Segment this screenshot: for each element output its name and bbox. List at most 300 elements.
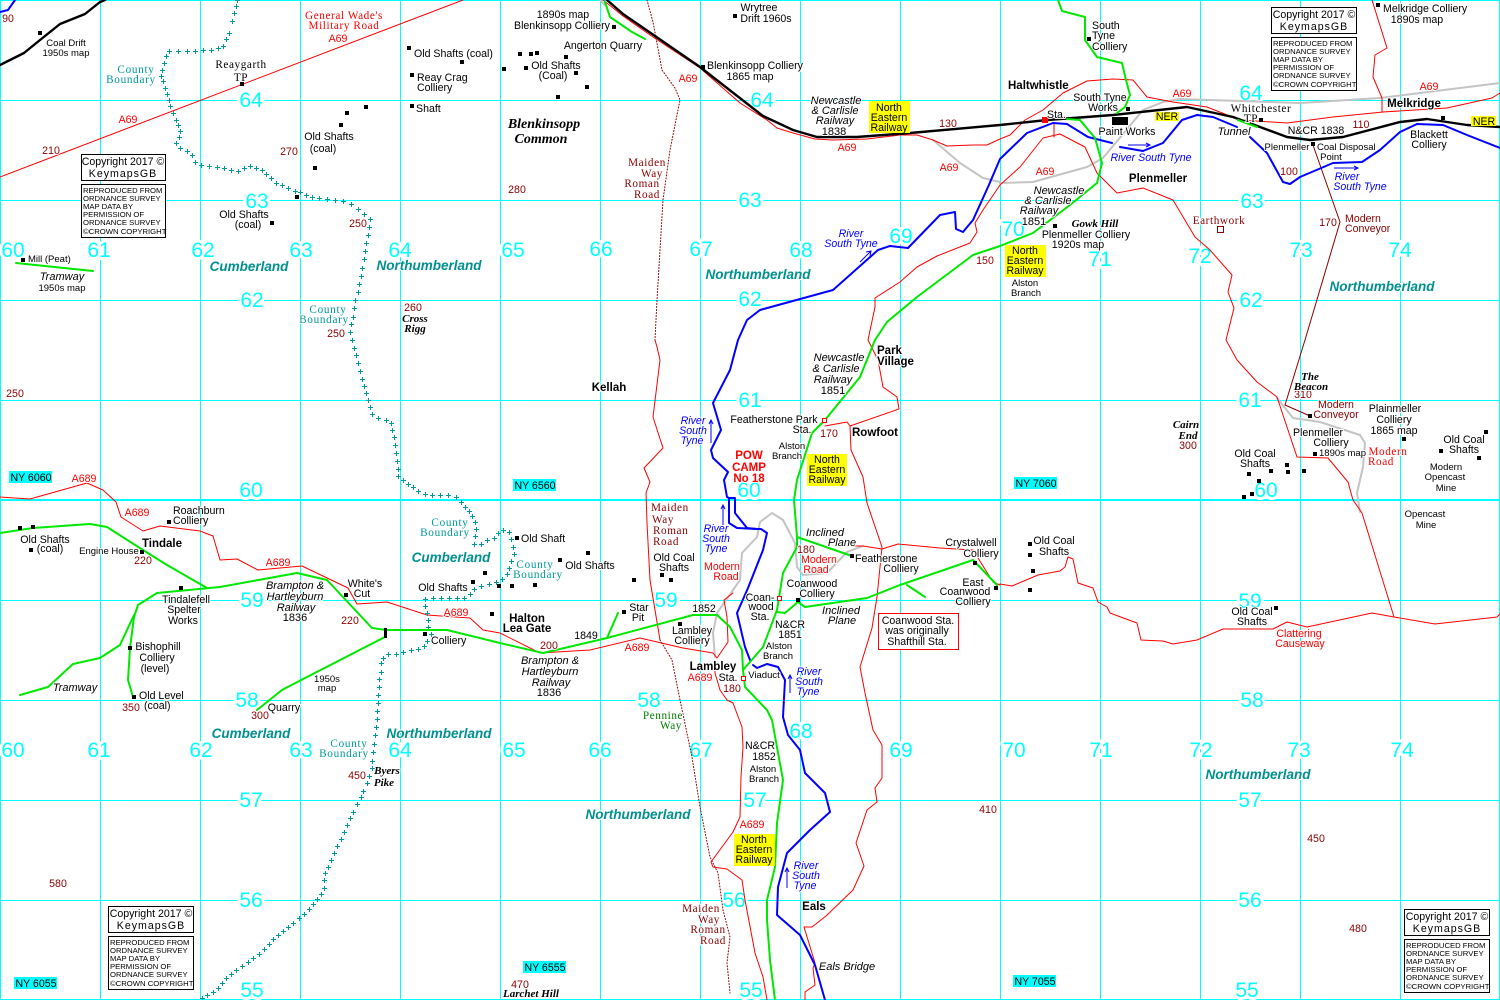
hill and landmark names: Rigg: [403, 323, 426, 335]
copyright box: lower left: ORDNANCE SURVEY: [110, 970, 188, 979]
junction bar: [384, 628, 387, 638]
callout: Coanwood station note: was originally: [884, 625, 949, 637]
railway names: & Carlisle: [1024, 195, 1072, 207]
county boundary labels: Boundary: [513, 569, 563, 581]
copyright box: lower left: ORDNANCE SURVEY: [110, 946, 188, 955]
collieries, shafts and works labels: centre: Shafts: [659, 562, 689, 574]
A road labels: A69: [940, 162, 959, 174]
yellow railway company labels: NER: [1156, 111, 1179, 123]
collieries, shafts and works labels: east: Sta.: [1047, 109, 1066, 121]
spot heights: 450: [348, 770, 366, 782]
road names: Modern: [801, 554, 837, 566]
yellow railway company labels: Eastern: [809, 464, 845, 476]
grid reference numbers: 60: [1254, 479, 1278, 502]
collieries, shafts and works labels: east: Coal Disposal: [1317, 142, 1376, 153]
National Grid square labels: NY 6060: [10, 472, 52, 484]
collieries, shafts and works labels: east: Colliery: [1376, 414, 1412, 426]
collieries, shafts and works labels: centre: Angerton Quarry: [564, 40, 643, 52]
county boundary labels: [106, 64, 563, 760]
spot heights: 250: [327, 328, 345, 340]
collieries, shafts and works labels: west: [20, 38, 615, 714]
site markers: shafts and collieries: [18, 3, 1488, 699]
hill and landmark names: The: [1301, 371, 1319, 383]
spot heights: 270: [280, 146, 298, 158]
collieries, shafts and works labels: west: 1950s: [314, 674, 340, 685]
A road labels: A689: [688, 672, 712, 684]
grid reference numbers: 67: [689, 739, 713, 762]
collieries, shafts and works labels: west: Old Shafts: [20, 534, 70, 546]
spot heights: 480: [1349, 923, 1367, 935]
county names: Northumberland: [705, 267, 811, 282]
railway names: N&CR: [775, 619, 805, 631]
collieries, shafts and works labels: west: Reay Crag: [417, 72, 468, 84]
grid reference numbers: 60: [737, 479, 761, 502]
road names: General Wade's: [305, 10, 383, 22]
collieries, shafts and works labels: east: Point: [1320, 152, 1342, 163]
collieries, shafts and works labels: west: 1950s map: [38, 283, 86, 294]
grid reference numbers: 56: [1238, 889, 1262, 912]
collieries, shafts and works labels: west: 1950s map: [42, 48, 90, 59]
collieries, shafts and works labels: centre: Colliery: [674, 635, 710, 647]
railway names: Railway: [277, 602, 317, 614]
road names: Modern: [1368, 446, 1408, 458]
Newcastle and Carlisle railway: [0, 0, 1500, 140]
spot heights: 220: [341, 615, 359, 627]
collieries, shafts and works labels: centre: East: [962, 577, 984, 589]
spot heights: 310: [1294, 389, 1312, 401]
collieries, shafts and works labels: east: Blackett: [1410, 129, 1448, 141]
road names: Maiden: [682, 903, 720, 915]
county names: Northumberland: [585, 807, 691, 822]
copyright box: lower right: MAP DATA BY: [1406, 957, 1456, 966]
grid reference numbers: 63: [289, 239, 313, 262]
A road labels: A69: [679, 73, 698, 85]
river labels: River: [1335, 171, 1360, 183]
collieries, shafts and works labels: west: (coal): [37, 543, 63, 555]
National Grid square labels: NY 7060: [1015, 478, 1057, 490]
road names: Roman: [653, 525, 688, 537]
collieries, shafts and works labels: centre: Featherstone Park: [730, 414, 818, 426]
collieries, shafts and works labels: east: 1865 map: [1370, 425, 1418, 437]
hill and landmark names: Byers: [373, 765, 400, 777]
grid reference numbers: 64: [388, 739, 412, 762]
grid reference numbers: 61: [87, 239, 111, 262]
collieries, shafts and works labels: west: Mill (Peat): [28, 254, 71, 265]
collieries, shafts and works labels: west: Old Shafts (coal): [414, 48, 493, 60]
collieries, shafts and works labels: centre: Star: [629, 602, 649, 614]
railway names: Branch: [763, 651, 793, 662]
hill and landmark names: Cairn: [1173, 419, 1199, 431]
A road labels: [72, 33, 1439, 831]
collieries, shafts and works labels: east: Plenmeller: [1265, 142, 1309, 153]
spot heights: 130: [939, 118, 957, 130]
collieries, shafts and works labels: west: Old Level: [139, 690, 184, 702]
spot heights: 410: [979, 804, 997, 816]
A road labels: A69: [329, 33, 348, 45]
A road labels: A689: [740, 819, 764, 831]
collieries, shafts and works labels: west: Old Shafts: [219, 209, 269, 221]
copyright box: lower right: PERMISSION OF: [1406, 965, 1467, 974]
A road labels: A689: [72, 473, 96, 485]
collieries, shafts and works labels: east: Colliery: [1313, 437, 1349, 449]
copyright box: upper right: ORDNANCE SURVEY: [1273, 47, 1351, 56]
road names: Conveyor: [1313, 409, 1359, 421]
grid reference numbers: 74: [1388, 239, 1412, 262]
copyright box: upper left: REPRODUCED FROM: [83, 186, 162, 195]
grid reference numbers: 62: [189, 739, 213, 762]
National Grid square labels: NY 6055: [15, 978, 57, 990]
river labels: South Tyne: [1333, 181, 1387, 193]
road names: Road: [1368, 456, 1394, 468]
county names: [210, 258, 1435, 822]
grid reference numbers: 73: [1287, 739, 1311, 762]
collieries, shafts and works labels: east: Old Coal: [1443, 434, 1485, 446]
grid reference numbers: 68: [789, 239, 813, 262]
grid reference numbers: 59: [240, 589, 264, 612]
railway names: Inclined: [822, 605, 861, 617]
grid reference numbers: 62: [240, 289, 264, 312]
county boundary: [161, 0, 514, 998]
river labels: River: [704, 523, 729, 535]
collieries, shafts and works labels: centre: Coanwood: [940, 586, 990, 598]
collieries, shafts and works labels: east: Old Coal: [1234, 448, 1276, 460]
hill and landmark names: TP: [234, 72, 248, 84]
copyright box: lower left: Copyright 2017 ©: [110, 908, 192, 920]
collieries, shafts and works labels: centre: Colliery: [955, 596, 991, 608]
copyright box: upper right: ORDNANCE SURVEY: [1273, 71, 1351, 80]
hill and landmark names: Gowk Hill: [1072, 218, 1119, 230]
railway names: Tunnel: [1218, 126, 1251, 138]
A road labels: A69: [838, 142, 857, 154]
A road labels: A69: [1420, 81, 1439, 93]
copyright box: upper left: MAP DATA BY: [83, 202, 133, 211]
settlement names: Rowfoot: [852, 427, 898, 439]
grid reference numbers: 72: [1189, 739, 1213, 762]
collieries, shafts and works labels: centre: Blenkinsopp Colliery: [514, 20, 611, 32]
county boundary labels: County: [117, 64, 155, 76]
collieries, shafts and works labels: west: Cut: [354, 588, 370, 600]
collieries, shafts and works labels: east: Tyne: [1092, 30, 1115, 42]
collieries, shafts and works labels: east: 1890s map: [1391, 14, 1443, 26]
spot heights: 210: [42, 145, 60, 157]
collieries, shafts and works labels: east: Melkridge Colliery: [1383, 3, 1468, 15]
spot heights: 170: [1319, 217, 1337, 229]
river labels: South Tyne: [824, 238, 878, 250]
copyright box: upper left: PERMISSION OF: [83, 210, 144, 219]
copyright box: upper right: KeymapsGB: [1280, 21, 1348, 33]
yellow railway company labels: North: [814, 454, 840, 466]
settlement names: Plenmeller: [1129, 173, 1188, 185]
callout: Coanwood station note: [878, 614, 958, 650]
grey modern roads: [600, 0, 1500, 657]
road names: Modern: [704, 561, 740, 573]
collieries, shafts and works labels: centre: Old Shafts: [531, 60, 581, 72]
grid reference numbers: 63: [1240, 190, 1264, 213]
copyright box: lower right: ORDNANCE SURVEY: [1406, 949, 1484, 958]
river labels: Tyne: [705, 543, 727, 555]
copyright box: upper right: REPRODUCED FROM: [1273, 39, 1352, 48]
river labels: River South Tyne: [1110, 152, 1192, 164]
copyright box: lower left: ©CROWN COPYRIGHT: [110, 979, 194, 988]
grid reference numbers: 60: [239, 479, 263, 502]
county names: Northumberland: [1205, 767, 1311, 782]
road names: Clattering: [1276, 628, 1322, 640]
railway names: [53, 95, 1344, 785]
railway names: & Carlisle: [812, 363, 860, 375]
collieries, shafts and works labels: west: (coal): [310, 143, 336, 155]
hill and landmark names: Cross: [402, 313, 428, 325]
railway names: Newcastle: [1034, 185, 1084, 197]
grid reference numbers: 57: [239, 789, 263, 812]
road names: Modern: [1318, 399, 1354, 411]
collieries, shafts and works labels: centre: Pit: [632, 612, 644, 624]
copyright box: upper right: PERMISSION OF: [1273, 63, 1334, 72]
hill and landmark names: Eals Bridge: [819, 961, 875, 973]
spot heights: 180: [797, 544, 815, 556]
railway names: Hartleyburn: [522, 666, 578, 678]
earthwork symbol: [1218, 226, 1224, 232]
road names: Maiden: [651, 502, 689, 514]
spot heights: 250: [349, 218, 367, 230]
grid reference numbers: 58: [637, 689, 661, 712]
railway names: & Carlisle: [811, 105, 859, 117]
collieries, shafts and works labels: centre: Blenkinsopp Colliery: [707, 60, 804, 72]
collieries, shafts and works labels: centre: Coan-: [746, 592, 775, 604]
grid reference numbers: 61: [738, 389, 762, 412]
collieries, shafts and works labels: east: Shafts: [1449, 444, 1479, 456]
hill and landmark names: Reaygarth: [215, 59, 267, 71]
spot heights: 220: [134, 555, 152, 567]
road names: Causeway: [1275, 638, 1325, 650]
settlement names: Haltwhistle: [1008, 80, 1069, 92]
yellow railway company labels: Railway: [870, 122, 908, 134]
collieries, shafts and works labels: west: White's: [348, 578, 382, 590]
copyright box: upper left: ©CROWN COPYRIGHT: [83, 227, 167, 236]
copyright box: lower left: REPRODUCED FROM: [110, 938, 189, 947]
railway names: 1849: [574, 630, 598, 642]
grid reference numbers: 64: [750, 89, 774, 112]
collieries, shafts and works labels: west: Colliery: [139, 652, 175, 664]
settlement names: Eals: [802, 901, 826, 913]
copyright box: upper left: ORDNANCE SURVEY: [83, 218, 161, 227]
collieries, shafts and works labels: west: Quarry: [268, 702, 301, 714]
grid reference numbers: 62: [191, 239, 215, 262]
railway names: Brampton &: [266, 580, 324, 592]
collieries, shafts and works labels: east: [1033, 3, 1485, 628]
copyright box: lower left: [108, 906, 194, 990]
county names: Cumberland: [212, 726, 291, 741]
county boundary labels: Boundary: [106, 74, 156, 86]
railway names: Alston: [766, 641, 792, 652]
railway names: Newcastle: [814, 352, 864, 364]
collieries, shafts and works labels: east: Old Coal: [1231, 606, 1273, 618]
river labels: South: [679, 425, 707, 437]
road names: Modern: [1345, 213, 1381, 225]
collieries, shafts and works labels: east: Plenmeller Colliery: [1042, 229, 1131, 241]
settlement names: Kellah: [592, 382, 626, 394]
hill and landmark names: Way: [660, 720, 682, 732]
hill and landmark names: TP: [1244, 113, 1258, 125]
A road labels: A69: [119, 114, 138, 126]
county names: Northumberland: [376, 258, 482, 273]
copyright box: upper left: Copyright 2017 ©: [82, 156, 164, 168]
collieries, shafts and works labels: east: 1920s map: [1052, 239, 1104, 251]
collieries, shafts and works labels: centre: Sta.: [719, 672, 737, 684]
copyright box: upper left: ORDNANCE SURVEY: [83, 194, 161, 203]
railway names: 1852: [692, 603, 716, 615]
A road labels: A689: [266, 557, 290, 569]
A road labels: A689: [125, 507, 149, 519]
grid reference numbers: 63: [245, 190, 269, 213]
hill and landmark names: Larchet Hill: [502, 988, 560, 1000]
spot heights: 150: [976, 255, 994, 267]
collieries, shafts and works labels: east: Colliery: [1411, 139, 1447, 151]
county boundary labels: County: [309, 304, 347, 316]
collieries, shafts and works labels: west: Old Shafts: [304, 131, 354, 143]
railway names: Viaduct: [748, 670, 780, 681]
copyright box: upper right: ©CROWN COPYRIGHT: [1273, 80, 1357, 89]
yellow railway company labels: Eastern: [736, 844, 772, 856]
callout: Coanwood station note: Shafthill Sta.: [887, 636, 947, 648]
railway names: Branch: [1011, 288, 1041, 299]
hill and landmark names: Pennine: [643, 710, 683, 722]
collieries, shafts and works labels: centre: Old Coal: [653, 552, 695, 564]
collieries, shafts and works labels: west: (level): [141, 663, 169, 675]
National Grid square labels: NY 6560: [514, 480, 556, 492]
collieries, shafts and works labels: centre: Sta.: [793, 424, 811, 436]
grid reference numbers: 62: [1239, 289, 1263, 312]
grid reference numbers: 73: [1289, 239, 1313, 262]
grid reference numbers: 71: [1088, 248, 1112, 271]
collieries, shafts and works labels: west: Coal Drift: [46, 38, 86, 49]
county boundary labels: Boundary: [319, 748, 369, 760]
grid reference numbers: 64: [239, 89, 263, 112]
settlement names: Village: [877, 356, 914, 368]
grid reference numbers: 70: [1002, 739, 1026, 762]
county names: Northumberland: [386, 726, 492, 741]
county names: Cumberland: [412, 550, 491, 565]
collieries, shafts and works labels: east: 1890s map: [1319, 448, 1366, 459]
county boundary labels: Boundary: [299, 314, 349, 326]
hill and landmark names: End: [1178, 430, 1198, 442]
yellow railway company labels: Eastern: [1007, 255, 1043, 267]
spot heights: 470: [511, 979, 529, 991]
National Grid square labels: NY 7055: [1014, 976, 1056, 988]
grid reference numbers: 66: [588, 739, 612, 762]
road names: Roman: [690, 924, 726, 936]
grid reference numbers: 68: [789, 720, 813, 743]
railway names: Railway: [532, 677, 572, 689]
copyright box: upper right: Copyright 2017 ©: [1273, 9, 1355, 21]
collieries, shafts and works labels: centre: 1865 map: [726, 71, 774, 83]
copyright box: lower right: ©CROWN COPYRIGHT: [1406, 982, 1490, 991]
grid reference numbers: 62: [738, 288, 762, 311]
collieries, shafts and works labels: west: Old Shafts: [565, 560, 615, 572]
copyright box: lower right: [1404, 910, 1490, 992]
spot heights: 170: [820, 428, 838, 440]
grid reference numbers: 74: [1390, 739, 1414, 762]
railway names: Alston: [779, 441, 805, 452]
National Grid square labels: [9, 471, 1057, 990]
grid reference numbers: 70: [1001, 218, 1025, 241]
river labels: Tyne: [681, 435, 703, 447]
yellow railway company labels: [734, 101, 1496, 866]
National Grid square labels: NY 6555: [524, 962, 566, 974]
collieries, shafts and works labels: west: Roachburn: [173, 505, 225, 517]
collieries, shafts and works labels: east: Opencast: [1405, 509, 1446, 520]
railway names: Brampton &: [521, 655, 579, 667]
railway names: 1852: [752, 751, 776, 763]
railway names: Inclined: [806, 527, 845, 539]
collieries, shafts and works labels: east: Plainmeller: [1369, 403, 1422, 415]
spot heights: 300: [251, 710, 269, 722]
river direction arrows: [709, 143, 1358, 888]
road names: Roman: [624, 178, 660, 190]
county boundary labels: Boundary: [420, 527, 470, 539]
road names: Maiden: [628, 157, 666, 169]
collieries, shafts and works labels: west: Colliery: [417, 82, 453, 94]
grid reference numbers: 57: [743, 789, 767, 812]
river labels: River: [797, 666, 822, 678]
grid reference numbers: 61: [1238, 389, 1262, 412]
grid reference numbers: 60: [1, 239, 25, 262]
spot heights: 280: [508, 184, 526, 196]
settlement names: Halton: [509, 613, 545, 625]
settlement names: Lea Gate: [503, 623, 551, 635]
collieries, shafts and works labels: east: Plenmeller: [1293, 427, 1343, 439]
collieries, shafts and works labels: west: (coal): [144, 700, 170, 712]
county names: Cumberland: [210, 259, 289, 274]
yellow railway company labels: Railway: [808, 474, 846, 486]
railway names: 1851: [821, 385, 845, 397]
river labels: South: [702, 533, 730, 545]
railway names: Alston: [750, 764, 776, 775]
spot heights: 180: [723, 683, 741, 695]
copyright box: upper left: [82, 154, 167, 238]
railway names: Alston: [1012, 278, 1038, 289]
hill and landmark names: Common: [515, 132, 568, 147]
road names: Way: [641, 168, 663, 180]
railway names: Newcastle: [811, 95, 861, 107]
A road labels: A689: [444, 607, 468, 619]
collieries, shafts and works labels: west: Works: [168, 615, 198, 627]
road names: Earthwork: [1193, 215, 1245, 227]
grid reference numbers: 69: [889, 225, 913, 248]
collieries, shafts and works labels: centre: Colliery: [799, 588, 835, 600]
collieries, shafts and works labels: east: Mine: [1436, 483, 1456, 494]
road names: Road: [700, 935, 726, 947]
collieries, shafts and works labels: east: South: [1092, 20, 1120, 32]
grid reference numbers: 71: [1089, 739, 1113, 762]
grid reference numbers: 63: [289, 739, 313, 762]
grid reference numbers: 56: [722, 889, 746, 912]
collieries, shafts and works labels: west: Tramway: [40, 271, 86, 283]
grid reference numbers: 61: [87, 739, 111, 762]
county boundary labels: County: [431, 517, 469, 529]
A road labels: A69: [1173, 88, 1192, 100]
collieries, shafts and works labels: east: Shafts: [1240, 458, 1270, 470]
grid reference numbers: 57: [1238, 789, 1262, 812]
river labels: [679, 152, 1387, 892]
road names: Way: [652, 514, 674, 526]
collieries, shafts and works labels: east: Old Coal: [1033, 535, 1075, 547]
grid reference numbers: 69: [889, 739, 913, 762]
railway names: Railway: [1020, 205, 1060, 217]
collieries, shafts and works labels: west: Shaft: [416, 103, 441, 115]
settlement names: Tindale: [142, 538, 182, 550]
collieries, shafts and works labels: west: Tindalefell: [162, 594, 210, 606]
copyright box: upper right: [1272, 8, 1357, 90]
